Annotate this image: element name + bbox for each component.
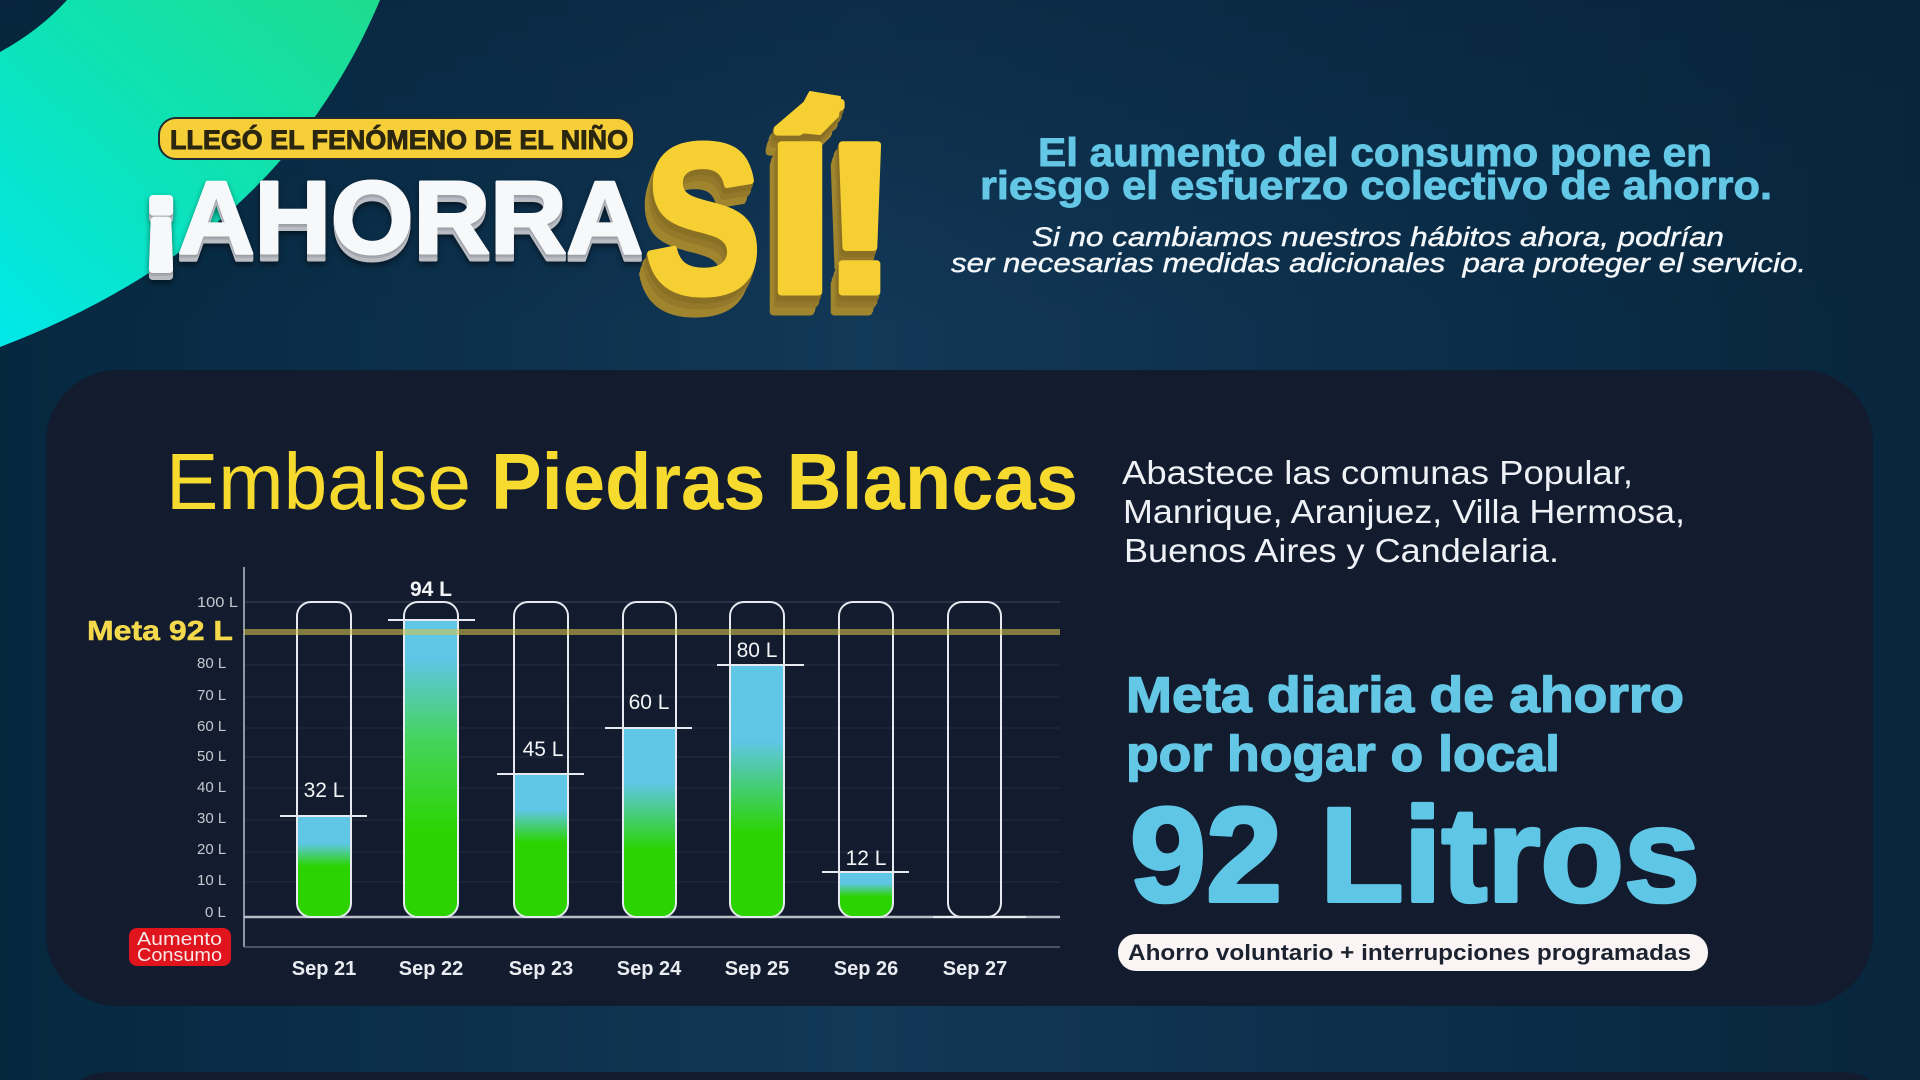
- x-axis labels: [292, 958, 1007, 980]
- bar: Sep 25: [717, 602, 804, 917]
- logo: Ahorra Sí: [142, 92, 900, 338]
- panel heading: Piedras Blancas: [491, 437, 1078, 526]
- y-axis labels: 40 L: [197, 779, 226, 796]
- y-axis labels: [197, 594, 238, 921]
- grid lines and axes: [244, 567, 1060, 947]
- x-axis labels: Sep 26: [834, 958, 898, 980]
- x-axis labels: Sep 23: [509, 958, 573, 980]
- subheadline: Si no cambiamos nuestros hábitos ahora, podrían: [1032, 222, 1724, 252]
- goal line: [244, 629, 1060, 635]
- wordmark: Ahorra: ¡: [142, 160, 180, 275]
- decorative teal wave: [0, 0, 380, 347]
- badge: aumento consumo: [129, 928, 231, 966]
- wordmark: Ahorra: AHORRA: [178, 160, 643, 275]
- pill note: [1118, 934, 1708, 971]
- bar: Sep 22: [388, 578, 475, 917]
- header message: [951, 131, 1806, 278]
- y-axis labels: 0 L: [205, 904, 226, 921]
- x-axis labels: Sep 24: [617, 958, 682, 980]
- bar: Sep 25: 80 L: [737, 639, 777, 662]
- bar: Sep 26: [822, 602, 909, 917]
- subheadline: [951, 222, 1806, 278]
- panel heading: [166, 437, 1078, 526]
- headline: El aumento del consumo pone en: [1038, 131, 1712, 175]
- tagline pill: LLEGÓ EL FENÓMENO DE EL NIÑO: [170, 124, 628, 155]
- y-axis labels: 20 L: [197, 841, 226, 858]
- wordmark: Sí: Í: [765, 99, 842, 338]
- headline: [980, 131, 1772, 208]
- wordmark: Sí: [645, 92, 900, 338]
- y-axis labels: 60 L: [197, 718, 226, 735]
- bar: Sep 26: 12 L: [846, 847, 886, 870]
- bar: Sep 23: [497, 602, 584, 917]
- bar chart: consumo diario: [87, 567, 1060, 980]
- bar: Sep 22: 94 L: [410, 578, 452, 601]
- x-axis labels: Sep 27: [943, 958, 1007, 980]
- text block: comunas: Manrique, Aranjuez, Villa Hermosa,: [1123, 493, 1685, 530]
- panel heading: Embalse: [166, 437, 471, 526]
- badge: aumento consumo: Aumento: [137, 929, 222, 949]
- bar: Sep 27: [933, 602, 1026, 917]
- x-axis labels: Sep 22: [399, 958, 463, 980]
- subheadline: ser necesarias medidas adicionales para proteger el servicio.: [951, 248, 1806, 278]
- text block: comunas: Abastece las comunas Popular,: [1122, 454, 1633, 491]
- goal label: Meta 92 L: [87, 615, 233, 646]
- wordmark: Sí: !: [820, 99, 900, 338]
- bar: Sep 21: [280, 602, 367, 917]
- bar: Sep 24: 60 L: [629, 691, 669, 714]
- bar: Sep 21: 32 L: [304, 779, 344, 802]
- bar: Sep 24: [605, 602, 692, 917]
- next panel edge: [80, 1072, 1870, 1080]
- bar: Sep 23: 45 L: [523, 738, 563, 761]
- wordmark: Sí: S: [645, 100, 761, 337]
- y-axis labels: 70 L: [197, 687, 226, 704]
- callout heading: por hogar o local: [1126, 726, 1560, 782]
- callout heading: [1126, 667, 1684, 782]
- badge: aumento consumo: Consumo: [137, 945, 222, 965]
- y-axis labels: 10 L: [197, 872, 226, 889]
- y-axis labels: 100 L: [197, 594, 238, 611]
- text block: comunas: Buenos Aires y Candelaria.: [1124, 532, 1559, 569]
- panel: Embalse Piedras Blancas: [46, 370, 1873, 1006]
- y-axis labels: 50 L: [197, 748, 226, 765]
- y-axis labels: 80 L: [197, 655, 226, 672]
- y-axis labels: 30 L: [197, 810, 226, 827]
- x-axis labels: Sep 21: [292, 958, 356, 980]
- x-axis labels: Sep 25: [725, 958, 789, 980]
- big number: 92 Litros: [1130, 781, 1700, 930]
- callout: meta diaria: [1118, 667, 1708, 971]
- text block: comunas: [1122, 454, 1685, 569]
- headline: riesgo el esfuerzo colectivo de ahorro.: [980, 164, 1772, 208]
- callout heading: Meta diaria de ahorro: [1126, 667, 1684, 723]
- pill note: Ahorro voluntario + interrupciones programadas: [1128, 940, 1691, 965]
